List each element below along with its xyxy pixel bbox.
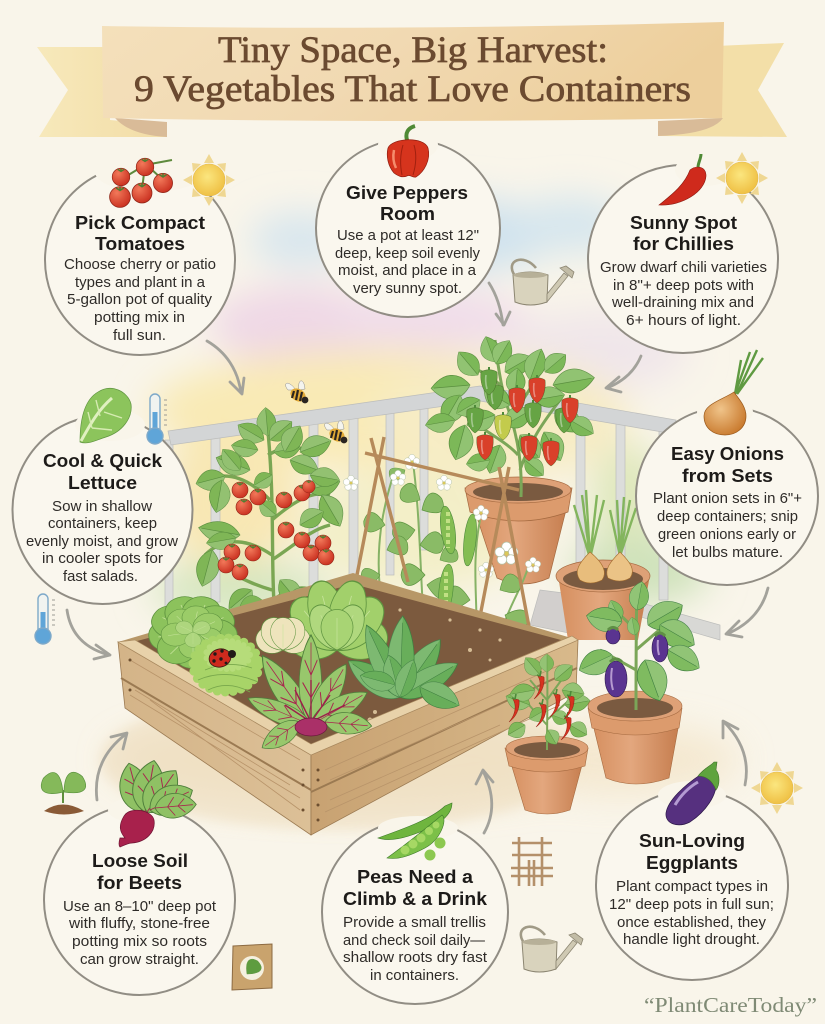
heading: peas: Peas Need a xyxy=(357,866,474,887)
text: beets: potting mix so roots xyxy=(72,933,207,950)
panel: tomatoes xyxy=(45,152,235,355)
text: tomatoes: types and plant in a xyxy=(75,274,206,291)
icon: sun xyxy=(751,762,803,814)
arrow: pepper tip xyxy=(489,283,510,325)
heading: lettuce: Lettuce xyxy=(68,472,137,493)
text: onions: deep containers; snip xyxy=(657,508,798,525)
heading: peppers: Give Peppers xyxy=(346,182,468,203)
icon: beet xyxy=(114,758,198,847)
text: chillies: well-draining mix and xyxy=(611,294,754,311)
text: lettuce: fast salads. xyxy=(63,568,138,585)
text: peas: in containers. xyxy=(370,967,459,984)
text: chillies: 6+ hours of light. xyxy=(626,312,741,329)
text: peppers: very sunny spot. xyxy=(353,280,462,297)
text: chillies: Grow dwarf chili varieties xyxy=(600,259,767,276)
icon: watering can xyxy=(512,260,574,305)
icon: sun xyxy=(716,152,768,204)
title banner xyxy=(37,22,787,137)
text: lettuce: in cooler spots for xyxy=(42,550,163,567)
text: peas: Provide a small trellis xyxy=(343,914,486,931)
romaine lettuce xyxy=(281,577,393,668)
panel: eggplants xyxy=(596,781,788,980)
banner right tail xyxy=(658,43,787,137)
icon: tomatoes xyxy=(110,158,173,207)
text: eggplants: once established, they xyxy=(617,914,766,931)
heading: tomatoes: Pick Compact xyxy=(75,212,205,233)
text: onions: green onions early or xyxy=(658,526,796,543)
heading: peas: Climb & a Drink xyxy=(343,888,488,909)
text: peppers: moist, and place in a xyxy=(338,262,477,279)
balcony railing xyxy=(165,386,720,640)
heading: beets: for Beets xyxy=(97,872,182,893)
icon: sun xyxy=(183,154,235,206)
panel: peas xyxy=(322,816,508,1004)
butterhead lettuce xyxy=(145,592,241,670)
heading: tomatoes: Tomatoes xyxy=(95,233,185,254)
watercolor sky washes xyxy=(110,197,740,805)
icon: eggplant xyxy=(666,762,719,825)
icon: bell pepper xyxy=(387,126,429,177)
icon: watering can xyxy=(521,927,583,972)
soil xyxy=(137,584,561,744)
bed left front face xyxy=(118,642,311,835)
banner main ribbon xyxy=(102,22,724,121)
heading: chillies: Sunny Spot xyxy=(630,212,737,233)
onion pot xyxy=(556,490,650,640)
arrow: peas tip xyxy=(476,770,493,833)
text: onions: let bulbs mature. xyxy=(672,544,783,561)
text: chillies: in 8"+ deep pots with xyxy=(613,277,754,294)
text: tomatoes: 5-gallon pot of quality xyxy=(67,291,212,308)
panel: beets xyxy=(44,797,235,995)
title text: Tiny Space, Big Harvest: xyxy=(218,30,608,71)
icon: pea pod xyxy=(378,803,452,860)
beet plant xyxy=(244,635,373,757)
text: peppers: Use a pot at least 12" xyxy=(337,227,479,244)
eggplant pot plant xyxy=(574,580,705,784)
icon: thermometer xyxy=(35,594,55,644)
arrow: chilli tip xyxy=(606,356,641,392)
text: peppers: deep, keep soil evenly xyxy=(335,245,480,262)
text: eggplants: Plant compact types in xyxy=(616,878,768,895)
panel: peppers xyxy=(316,129,500,317)
title text xyxy=(134,30,691,110)
heading: lettuce: Cool & Quick xyxy=(43,450,163,471)
bed right front face xyxy=(311,640,578,835)
heading: peppers: Room xyxy=(380,203,435,224)
banner left tail xyxy=(37,47,167,137)
pale endive xyxy=(251,613,315,660)
text: lettuce: containers, keep xyxy=(48,515,157,532)
text: lettuce: Sow in shallow xyxy=(52,498,152,515)
arrow: tomato tip xyxy=(207,341,244,394)
panel: chillies xyxy=(588,154,778,353)
text: peas: shallow roots dry fast xyxy=(343,949,488,966)
credit: “PlantCareToday” xyxy=(644,993,817,1017)
bed rim xyxy=(118,636,578,755)
text: beets: with fluffy, stone-free xyxy=(68,915,210,932)
text: eggplants: handle light drought. xyxy=(623,931,760,948)
panel: onions xyxy=(636,398,818,585)
icon: seedling xyxy=(37,768,90,814)
arrow: beet tip xyxy=(96,733,127,800)
icon: onion xyxy=(704,350,763,435)
chili pot plant xyxy=(503,653,592,814)
text: tomatoes: Choose cherry or patio xyxy=(64,256,216,273)
icon: soil bag xyxy=(232,944,272,990)
text: eggplants: 12" deep pots in full sun; xyxy=(609,896,774,913)
frilly lettuce with ladybug xyxy=(193,638,259,692)
terracotta pot xyxy=(465,477,572,584)
spinach xyxy=(341,616,464,716)
title text: 9 Vegetables That Love Containers xyxy=(134,69,691,110)
icon: small trellis xyxy=(511,837,553,886)
heading: chillies: for Chillies xyxy=(633,233,734,254)
text: tomatoes: potting mix in xyxy=(94,309,185,326)
text: peas: and check soil daily— xyxy=(343,932,485,949)
icon: chilli xyxy=(659,154,706,205)
heading: eggplants: Eggplants xyxy=(646,852,738,873)
text: onions: Plant onion sets in 6"+ xyxy=(653,490,802,507)
heading: onions: Easy Onions xyxy=(671,443,784,464)
ladybug xyxy=(207,646,236,670)
text: lettuce: evenly moist, and grow xyxy=(26,533,178,550)
bees xyxy=(286,381,347,444)
arrow: eggplant tip xyxy=(723,721,746,785)
arrow: onion tip xyxy=(726,588,768,637)
text: tomatoes: full sun. xyxy=(113,327,166,344)
pepper pot with plant xyxy=(424,334,598,584)
heading: beets: Loose Soil xyxy=(92,850,188,871)
wooden raised bed xyxy=(100,573,580,835)
arrow: lettuce tip xyxy=(67,610,110,659)
tomato plant xyxy=(192,407,350,620)
text: beets: Use an 8–10" deep pot xyxy=(63,898,217,915)
text: beets: can grow straight. xyxy=(80,951,199,968)
panel: lettuce xyxy=(12,409,192,604)
heading: onions: from Sets xyxy=(682,465,773,486)
pea trellis with vines xyxy=(343,437,541,668)
icon: lettuce leaf xyxy=(80,388,131,443)
bed inside walls xyxy=(118,573,578,755)
heading: eggplants: Sun-Loving xyxy=(639,830,745,851)
icon: thermometer xyxy=(147,394,167,444)
